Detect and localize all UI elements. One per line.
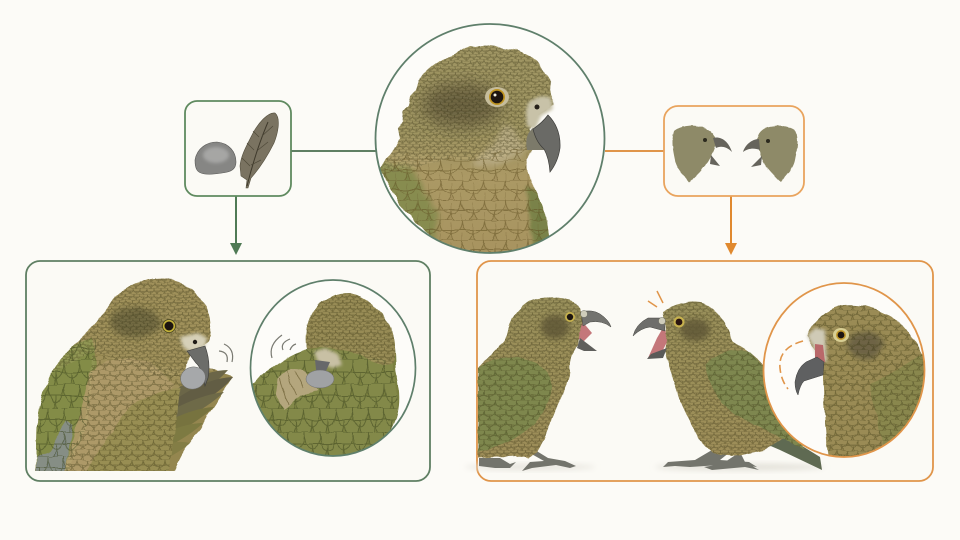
eye: [674, 316, 684, 328]
cheek patch: [541, 315, 569, 339]
face patch: [807, 328, 827, 362]
beak: [526, 115, 560, 172]
stone held in beak: [178, 364, 208, 392]
flight feather fan: [171, 370, 233, 456]
arrow: down to display panel: [725, 196, 737, 255]
right kea calling: [633, 291, 822, 470]
left kea calling: [478, 297, 611, 471]
icon: head silhouette facing right: [672, 126, 716, 182]
panel: vocal display with open beaks: [465, 261, 933, 481]
eye: [565, 312, 575, 322]
stone: [306, 370, 334, 388]
large preening kea: [35, 278, 234, 471]
motion lines: [219, 344, 233, 362]
cere: [658, 318, 666, 324]
beak upper: [633, 318, 665, 336]
wing: [478, 357, 552, 452]
bird body and head: [380, 45, 554, 252]
legs: [479, 450, 576, 471]
inset circle: open beak close-up: [764, 283, 930, 465]
cheek patch: [680, 319, 710, 341]
ground shadows: [465, 464, 825, 470]
legs: [663, 450, 759, 470]
icon: head silhouette facing left: [757, 126, 798, 182]
tail: [745, 420, 822, 470]
cere: [180, 333, 207, 352]
mouth: [815, 344, 825, 366]
icon: feather: [240, 113, 278, 188]
inset circle: tucked preening kea: [245, 280, 416, 470]
icon: beak facing left: [743, 139, 770, 167]
beak lower: [647, 348, 667, 359]
eye: [833, 328, 849, 342]
beak: [187, 346, 209, 386]
wing: [705, 350, 805, 450]
panel: preening with stone: [26, 261, 430, 485]
beak lower: [577, 338, 597, 351]
face patch: [314, 348, 342, 368]
box: stone and feather icons: [185, 101, 291, 196]
icon: beak facing right: [703, 138, 732, 166]
raised wing: [85, 370, 233, 475]
dashed gape arc: [780, 341, 803, 389]
eye: [162, 320, 176, 332]
beak: [315, 360, 330, 380]
body: [663, 302, 805, 456]
cere and nostril: [526, 96, 553, 130]
mouth: [648, 326, 668, 358]
motion lines: [271, 335, 296, 358]
connector: focus bird to silhouettes box: [605, 150, 664, 152]
icon: stone: [195, 142, 236, 174]
mouth: [576, 320, 592, 343]
eye: [485, 87, 509, 107]
connector: focus bird to stone and feather box: [291, 150, 377, 152]
alert marks: [648, 291, 663, 307]
body: [478, 297, 582, 458]
central circle: kea head portrait: [375, 24, 604, 262]
beak upper: [581, 311, 611, 327]
beak: [795, 357, 824, 395]
box: two facing head silhouettes: [664, 106, 804, 196]
cere: [580, 310, 588, 318]
arrow: down to preening panel: [230, 196, 242, 255]
